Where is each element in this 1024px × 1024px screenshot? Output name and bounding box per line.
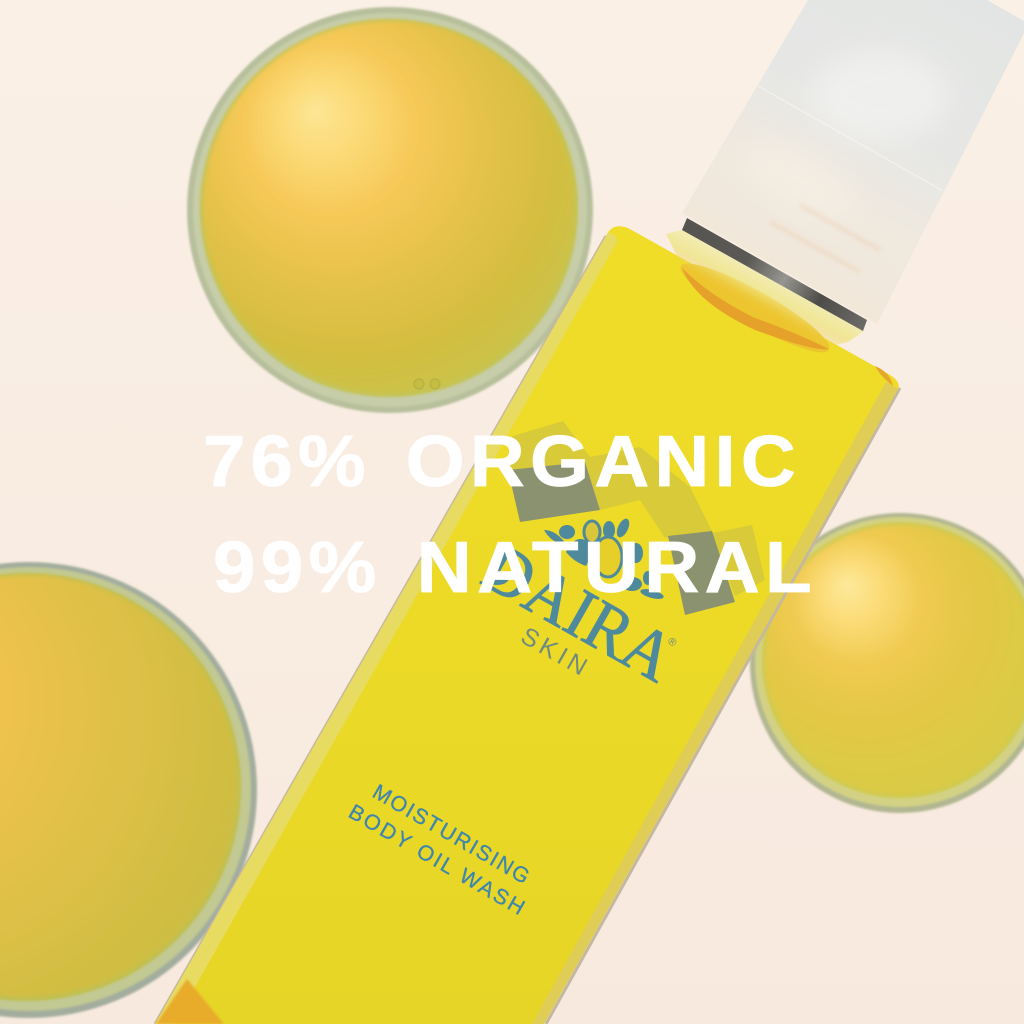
bottle neck glass <box>666 230 864 347</box>
bottle body <box>155 226 899 1024</box>
bottle edge shadow <box>155 236 900 1024</box>
oil droplet left <box>0 562 257 1018</box>
brand sub-name: SKIN <box>516 622 592 681</box>
orange oil meniscus <box>673 251 837 365</box>
label hatch chevrons <box>508 421 765 615</box>
bottle base orange tint <box>156 979 224 1024</box>
headline line 1: 76% ORGANIC <box>203 422 801 502</box>
brand name: DAIRA <box>470 529 688 698</box>
left pale edge strip <box>155 233 618 1024</box>
right pale edge strip <box>532 382 898 1024</box>
headline <box>203 422 817 608</box>
headline line 2: 99% NATURAL <box>213 528 817 608</box>
oil droplet right <box>750 513 1024 813</box>
shoulder orange tint <box>875 366 893 386</box>
metal collar band <box>682 218 867 331</box>
bottle cap <box>682 0 1024 324</box>
logo flora mark <box>485 517 665 601</box>
product name line 1: MOISTURISING <box>368 780 534 889</box>
registered mark: ® <box>666 635 678 650</box>
oil droplet top <box>187 7 593 413</box>
product name line 2: BODY OIL WASH <box>344 800 529 920</box>
